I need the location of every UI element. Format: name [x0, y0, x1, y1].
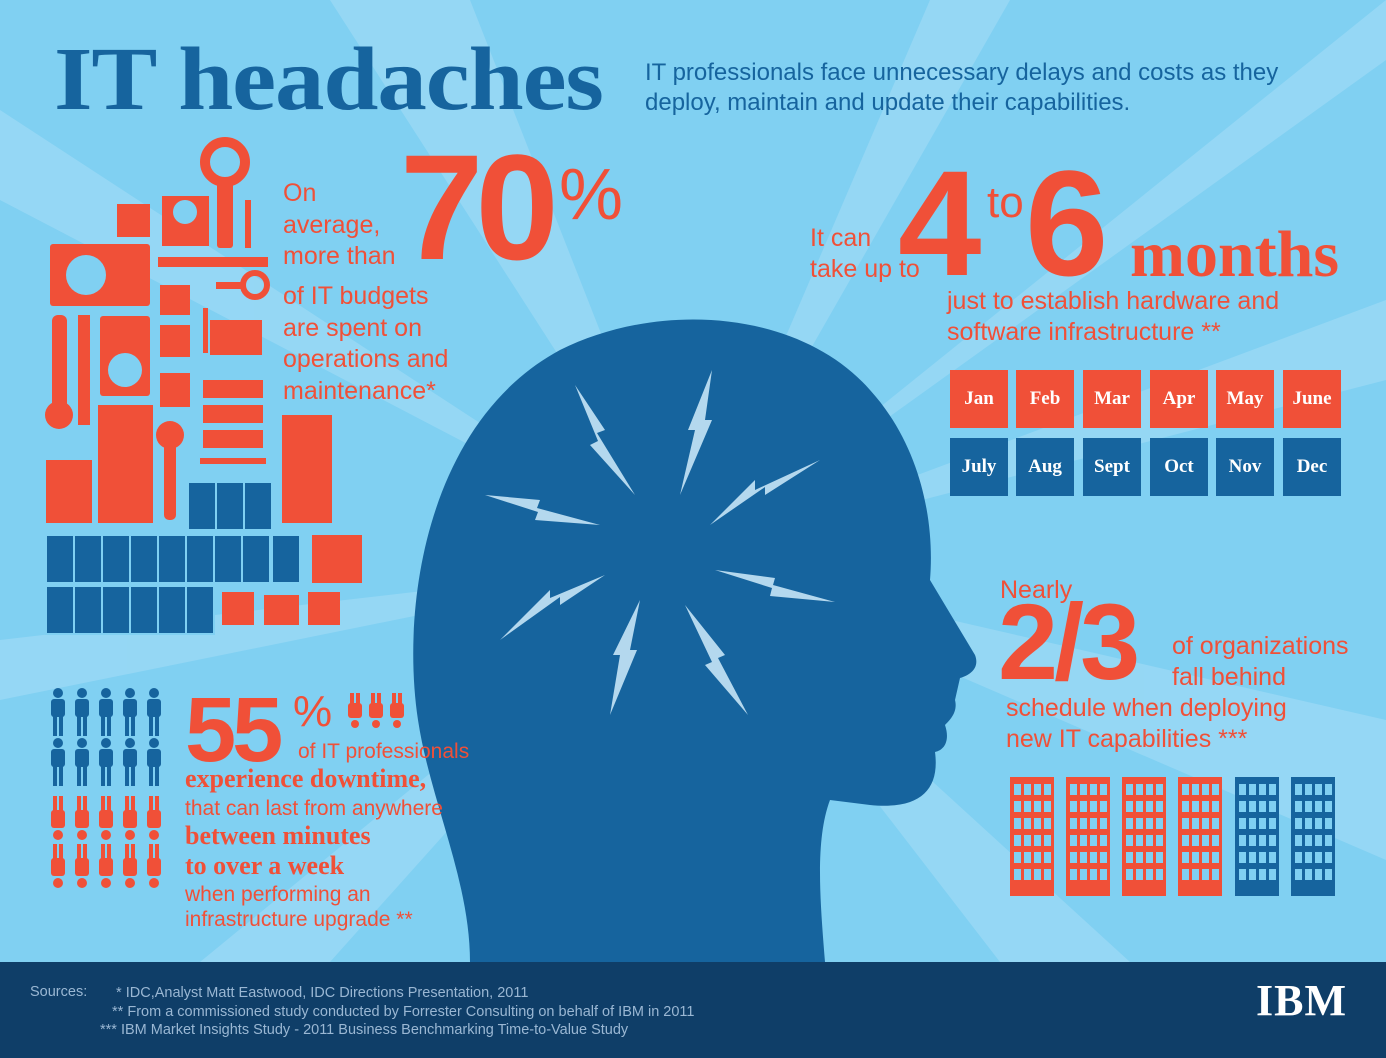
stat: 4 to 6 months: software infrastructure **: [947, 318, 1221, 346]
stat: 55% downtime: to over a week: [185, 851, 344, 880]
icon cluster: hardware and tools: [45, 137, 362, 635]
footer: sources: *** IBM Market Insights Study - 2011 Business Benchmarking Time-to-Value Study: [100, 1022, 628, 1038]
stat: 4 to 6 months: just to establish hardware and: [947, 287, 1279, 315]
stat: 4 to 6 months: [810, 139, 1339, 346]
stat: 55% downtime: when performing an: [185, 883, 371, 906]
stat: 2/3 organizations: schedule when deploying: [1006, 694, 1287, 722]
month calendar grid: Mar: [1094, 388, 1130, 409]
month calendar grid: June: [1292, 388, 1332, 409]
stat: 70%: On: [283, 179, 316, 207]
month calendar grid: July: [962, 456, 996, 477]
subtitle: [645, 59, 1278, 116]
stat: 70%: are spent on: [283, 314, 422, 342]
head silhouette: [413, 319, 976, 962]
stat: 4 to 6 months: It can: [810, 224, 871, 252]
stat: 4 to 6 months: 4: [898, 139, 981, 307]
month calendar grid: Apr: [1163, 388, 1195, 409]
stat: 2/3 organizations: Nearly: [1000, 576, 1072, 604]
stat: 2/3 organizations: new IT capabilities ***: [1006, 725, 1247, 753]
month calendar grid: Jan: [964, 388, 994, 409]
people icons: [51, 688, 161, 888]
stat: 4 to 6 months: take up to: [810, 255, 920, 283]
month calendar grid: Feb: [1030, 388, 1060, 409]
stat: 55% downtime: that can last from anywhere: [185, 797, 443, 820]
stat: 55% downtime: infrastructure upgrade **: [185, 908, 413, 931]
stat: 55% downtime: [185, 679, 469, 931]
lightning bolts: [485, 370, 835, 715]
stat: 70%: average,: [283, 210, 380, 238]
stat: 2/3 organizations: of organizations: [1172, 632, 1349, 660]
footer: sources: * IDC,Analyst Matt Eastwood, IDC Directions Presentation, 2011: [116, 985, 528, 1001]
stat: 4 to 6 months: months: [1130, 218, 1339, 291]
footer: sources: [0, 962, 1386, 1058]
stat: 55% downtime: %: [293, 687, 332, 736]
subtitle: IT professionals face unnecessary delays and costs as they: [645, 59, 1278, 86]
month calendar grid: Sept: [1094, 456, 1130, 477]
stat: 4 to 6 months: 6: [1025, 139, 1108, 307]
month calendar grid: Dec: [1297, 456, 1327, 477]
title: IT headaches: [54, 30, 603, 129]
month calendar grid: Oct: [1164, 456, 1194, 477]
building icons: [1010, 777, 1335, 896]
stat: 70%: maintenance*: [283, 376, 436, 404]
stat: 55% downtime: of IT professionals: [298, 740, 469, 763]
stat: 4 to 6 months: to: [987, 178, 1024, 227]
stat: 70%: %: [559, 155, 623, 235]
stat: 2/3 organizations: [998, 576, 1349, 753]
stat: 2/3 organizations: fall behind: [1172, 663, 1286, 691]
month calendar grid: Aug: [1028, 456, 1062, 477]
subtitle: deploy, maintain and update their capabilities.: [645, 89, 1130, 116]
stat: 70%: 70: [400, 123, 551, 291]
footer: sources: ** From a commissioned study conducted by Forrester Consulting on behalf of IBM in 2011: [112, 1004, 694, 1020]
month calendar grid: [950, 370, 1341, 496]
stat: 55% downtime: 55: [185, 679, 279, 781]
IBM logo: IBM: [1256, 976, 1347, 1025]
stat: 55% downtime: between minutes: [185, 821, 371, 850]
stat: 70%: more than: [283, 242, 396, 270]
footer: sources: Sources:: [30, 984, 87, 1000]
month calendar grid: May: [1227, 388, 1263, 409]
month calendar grid: Nov: [1229, 456, 1261, 477]
stat: 2/3 organizations: 2/3: [998, 581, 1136, 702]
stat: 70%: operations and: [283, 345, 448, 373]
stat: 70%: of IT budgets: [283, 282, 428, 310]
stat: 55% downtime: experience downtime,: [185, 764, 426, 793]
stat: 70%: [283, 123, 623, 404]
